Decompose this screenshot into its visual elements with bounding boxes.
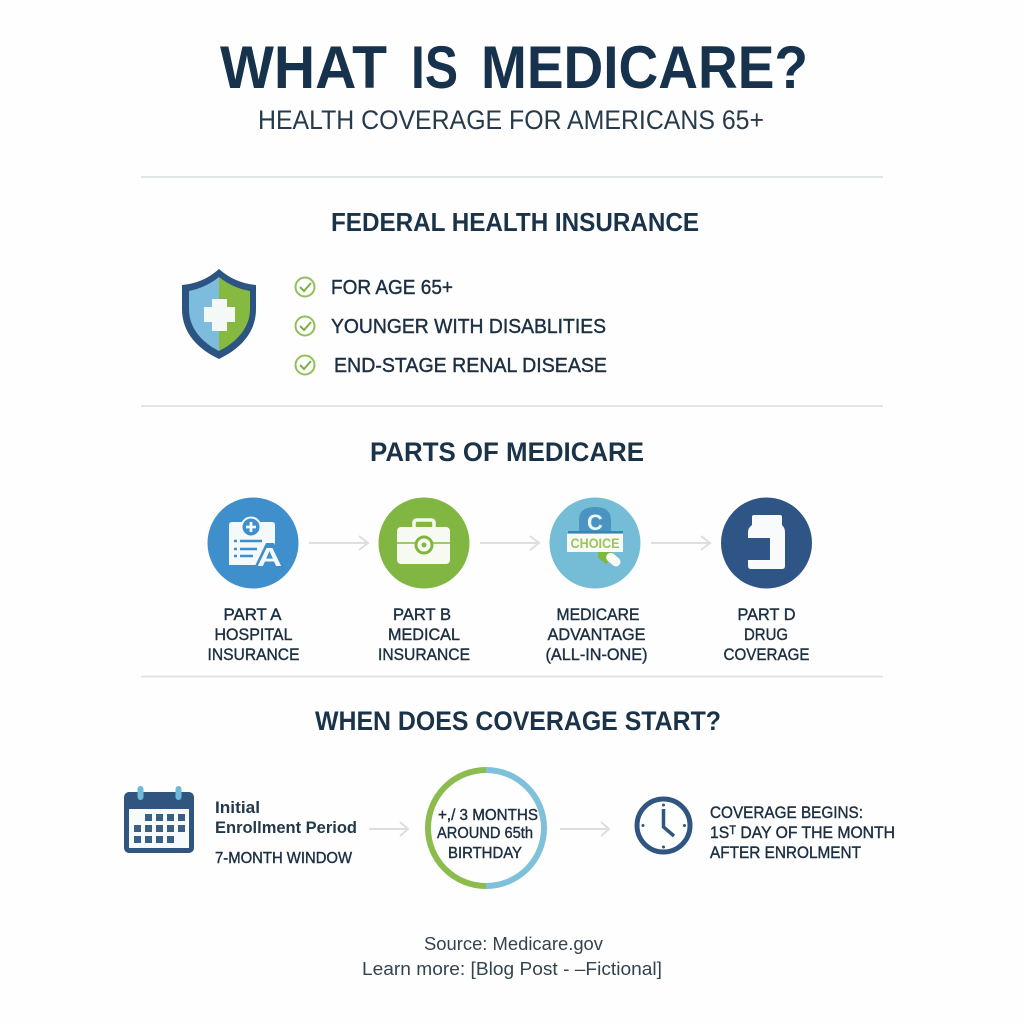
text: initial enrollment period: Initial xyxy=(215,798,260,817)
label: medicare advantage xyxy=(546,605,648,664)
heading: parts of medicare: PARTS OF MEDICARE xyxy=(370,437,644,467)
icon: part A: A xyxy=(257,542,282,572)
ring: plus or minus 3 months: BIRTHDAY xyxy=(448,845,522,862)
ring: plus or minus 3 months: +,/ 3 MONTHS xyxy=(438,807,538,824)
icon: clock xyxy=(637,799,690,852)
panel: when does coverage start xyxy=(124,706,895,886)
subtitle: HEALTH COVERAGE FOR AMERICANS 65+ xyxy=(258,105,764,135)
icon: medicare advantage choice: CHOICE xyxy=(570,536,620,551)
icon: part B xyxy=(378,498,470,588)
source footer xyxy=(362,933,662,979)
text: initial enrollment period xyxy=(215,798,357,867)
label: part A xyxy=(208,605,300,664)
heading: when does coverage start: WHEN DOES COVERAGE START? xyxy=(315,706,721,736)
label: part B xyxy=(378,605,470,664)
label: part D: COVERAGE xyxy=(724,645,810,664)
text: coverage begins: COVERAGE BEGINS: xyxy=(710,804,863,822)
ring: plus or minus 3 months xyxy=(428,770,544,886)
text: initial enrollment period: 7-MONTH WINDOW xyxy=(215,850,352,867)
source footer: Learn more: [Blog Post - –Fictional] xyxy=(362,958,662,979)
label: medicare advantage: MEDICARE xyxy=(556,605,640,624)
label: medicare advantage: ADVANTAGE xyxy=(548,625,646,644)
checklist item: end-stage renal disease: END-STAGE RENAL DISEASE xyxy=(334,355,607,377)
source footer: Source: Medicare.gov xyxy=(424,933,604,954)
text: coverage begins xyxy=(710,804,895,862)
checklist item: younger with disabilities: YOUNGER WITH DISABLITIES xyxy=(331,316,606,338)
icon: medicare advantage choice xyxy=(550,498,640,588)
label: part D xyxy=(724,605,810,664)
icon: shield xyxy=(182,269,256,359)
icon: medicare advantage choice: C xyxy=(587,510,603,535)
label: part B: MEDICAL xyxy=(388,625,460,644)
label: part A: INSURANCE xyxy=(208,645,300,664)
title: MEDICARE? xyxy=(481,34,808,101)
arrow xyxy=(369,822,408,836)
title: WHAT xyxy=(220,34,387,101)
checklist item: age 65+: FOR AGE 65+ xyxy=(331,277,453,299)
label: part B: PART B xyxy=(393,605,451,624)
label: part A: PART A xyxy=(224,605,282,624)
label: part B: INSURANCE xyxy=(378,645,470,664)
title: IS xyxy=(411,34,458,101)
arrow xyxy=(309,536,368,550)
heading: federal health insurance: FEDERAL HEALTH INSURANCE xyxy=(331,207,699,237)
icon: part A xyxy=(208,498,298,588)
label: part D: DRUG xyxy=(744,625,788,644)
text: initial enrollment period: Enrollment Period xyxy=(215,818,357,837)
title xyxy=(220,34,808,101)
icon: part D drug bottle xyxy=(721,498,812,588)
label: medicare advantage: (ALL-IN-ONE) xyxy=(546,645,648,664)
text: coverage begins: AFTER ENROLMENT xyxy=(710,844,861,862)
panel: parts of medicare xyxy=(208,437,812,664)
text: coverage begins: 1Sᵀ DAY OF THE MONTH xyxy=(710,824,895,842)
ring: plus or minus 3 months: AROUND 65th xyxy=(437,825,533,842)
arrow xyxy=(560,822,609,836)
label: part A: HOSPITAL xyxy=(214,625,292,644)
arrow xyxy=(651,536,710,550)
icon: calendar xyxy=(124,786,194,853)
label: part D: PART D xyxy=(738,605,796,624)
arrow xyxy=(480,536,539,550)
panel: federal health insurance xyxy=(182,207,699,377)
